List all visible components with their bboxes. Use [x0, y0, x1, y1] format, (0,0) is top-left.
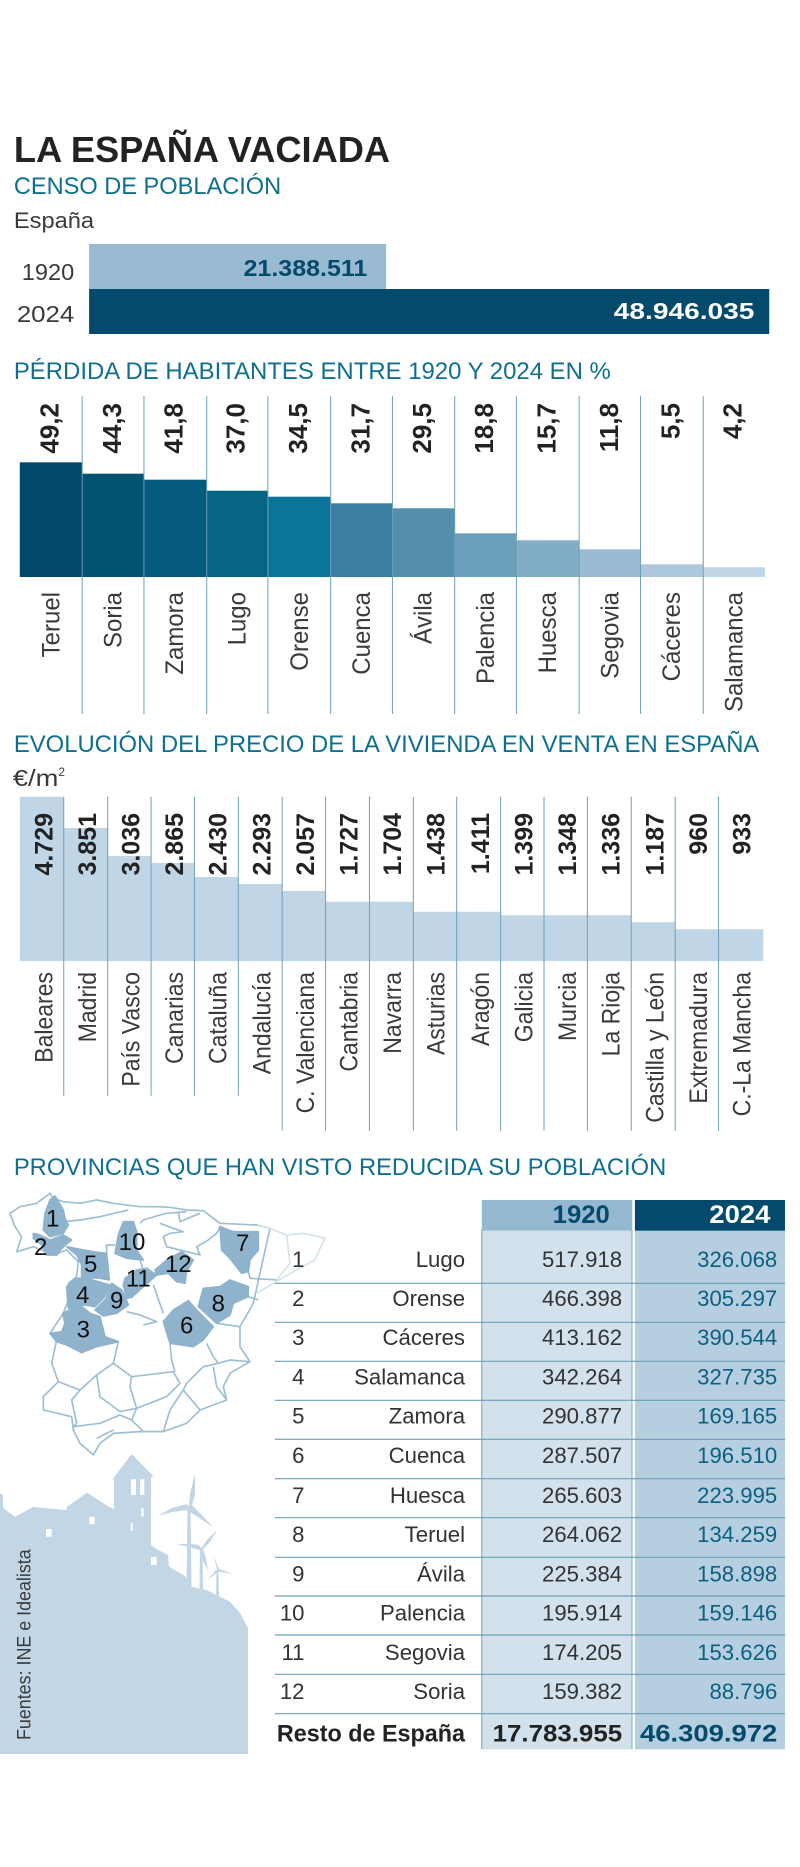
row: Orense: 305.297: [697, 1286, 777, 1311]
row: Cuenca: Cuenca: [389, 1443, 466, 1468]
map numbers: 11: [126, 1266, 151, 1293]
chart: population loss by province: Ávila: [410, 592, 438, 644]
row: Cuenca: 196.510: [697, 1443, 777, 1468]
chart: housing price by region: Murcia: [554, 971, 582, 1041]
unit label: €/m: [13, 765, 58, 791]
chart: housing price by region: 933: [729, 813, 756, 855]
chart: population loss by province: Zamora: [162, 592, 189, 675]
row: Cuenca: 287.507: [542, 1443, 622, 1468]
row: Huesca: Huesca: [390, 1483, 466, 1508]
chart: housing price by region: Cantabria: [336, 971, 364, 1072]
map numbers: 6: [180, 1312, 193, 1339]
chart: census bars: [17, 244, 769, 334]
chart: population loss by province: 44,3: [99, 403, 127, 454]
chart: housing price by region: 2.865: [161, 813, 189, 876]
row: Lugo: 517.918: [542, 1247, 622, 1272]
subheading: España: España: [14, 208, 95, 233]
row: Segovia: [281, 1640, 777, 1665]
table header: [553, 1202, 771, 1229]
chart: population loss by province: Soria: [100, 592, 127, 648]
chart: population loss by province: 15,7: [534, 403, 561, 454]
row: Lugo: [292, 1247, 777, 1272]
chart: housing price by region: 2.293: [248, 813, 276, 876]
row: Palencia: 159.146: [697, 1600, 777, 1626]
row: Resto de España: 46.309.972: [640, 1721, 777, 1748]
row: Salamanca: 342.264: [542, 1364, 622, 1390]
row: Cáceres: 390.544: [697, 1325, 777, 1350]
chart: housing price by region: 1.411: [467, 813, 495, 874]
chart: population loss by province: Teruel: [38, 592, 66, 657]
chart: population loss by province: Segovia: [597, 592, 624, 679]
row: Ávila: Ávila: [417, 1561, 466, 1587]
heading: censo de población: CENSO DE POBLACIÓN: [14, 173, 281, 200]
map numbers: 8: [212, 1291, 225, 1318]
chart: population loss by province: 49,2: [37, 403, 64, 454]
table column backgrounds: [482, 1200, 785, 1749]
chart: population loss by province: 11,8: [596, 403, 624, 452]
heading: provincias: PROVINCIAS QUE HAN VISTO REDUCIDA SU POBLACIÓN: [14, 1154, 666, 1181]
row: Huesca: 265.603: [542, 1483, 622, 1508]
illustration: village and wind turbines: [0, 1454, 248, 1754]
heading: pérdida de habitantes: PÉRDIDA DE HABITANTES ENTRE 1920 Y 2024 EN %: [14, 358, 611, 385]
pale outline: Catalonia: [257, 1225, 325, 1293]
chart: housing price by region: La Rioja: [598, 971, 626, 1056]
row: Cuenca: [292, 1443, 777, 1468]
chart: census bars: 2024: [17, 301, 75, 327]
chart: housing price by region: Castilla y León: [641, 972, 670, 1123]
row: Cáceres: [292, 1325, 777, 1350]
chart: population loss by province: Cuenca: [348, 592, 376, 675]
row: Zamora: 5: [292, 1403, 304, 1429]
map numbers: 4: [76, 1282, 89, 1309]
row: Palencia: Palencia: [380, 1600, 466, 1626]
chart: population loss by province: 37,0: [223, 403, 250, 454]
chart: housing price by region: 1.348: [554, 813, 582, 876]
row: Huesca: 7: [292, 1483, 304, 1508]
chart: housing price by region: C. Valenciana: [292, 971, 320, 1113]
row: Ávila: 158.898: [697, 1561, 777, 1587]
map numbers: 10: [119, 1229, 145, 1256]
chart: population loss by province: Orense: [286, 592, 314, 671]
row: Zamora: Zamora: [389, 1403, 466, 1429]
chart: housing price by region: C.-La Mancha: [729, 971, 757, 1116]
chart: population loss by province: 31,7: [347, 403, 375, 454]
row: Lugo: 326.068: [697, 1247, 777, 1272]
row: Zamora: 290.877: [542, 1403, 622, 1429]
heading: evolución del precio: EVOLUCIÓN DEL PRECIO DE LA VIVIENDA EN VENTA EN ESPAÑA: [14, 731, 759, 758]
row: Zamora: [292, 1403, 777, 1429]
chart: population loss by province: 5,5: [658, 403, 686, 439]
row: Palencia: 195.914: [542, 1600, 622, 1626]
row: Soria: 159.382: [542, 1679, 622, 1704]
map numbers: 3: [77, 1316, 90, 1343]
row: Palencia: [280, 1600, 777, 1626]
row: Resto de España: Resto de España: [277, 1721, 466, 1748]
row: Teruel: 264.062: [542, 1522, 622, 1547]
chart: housing price by region: Aragón: [467, 972, 495, 1046]
map numbers: 12: [165, 1251, 192, 1278]
chart: housing price by region: País Vasco: [118, 972, 146, 1087]
row: Soria: 88.796: [709, 1679, 777, 1704]
row: Resto de España: 17.783.955: [493, 1721, 622, 1748]
row: Ávila: 9: [292, 1561, 304, 1587]
chart: housing price by region: 3.036: [118, 813, 146, 876]
row: Teruel: Teruel: [405, 1522, 465, 1547]
row: Zamora: 169.165: [697, 1403, 777, 1429]
table header: 2024: [709, 1202, 771, 1229]
chart: housing price by region: 3.851: [74, 813, 102, 876]
row: Huesca: [292, 1483, 777, 1508]
chart: population loss by province: 34,5: [285, 403, 313, 454]
row: Orense: Orense: [392, 1286, 465, 1311]
chart: housing price by region: Galicia: [511, 971, 539, 1042]
row: Salamanca: 327.735: [697, 1364, 777, 1390]
row: Teruel: 8: [292, 1522, 304, 1547]
row: Palencia: 10: [280, 1600, 304, 1626]
chart: population loss by province: Lugo: [224, 592, 252, 645]
map numbers: 9: [110, 1287, 123, 1314]
row: Soria: 12: [280, 1679, 304, 1704]
row: Segovia: 153.626: [697, 1640, 777, 1665]
row: Segovia: 11: [281, 1640, 304, 1665]
title: LA ESPAÑA VACIADA: [14, 130, 390, 170]
row: Cuenca: 6: [292, 1443, 304, 1468]
chart: housing price by region: Madrid: [74, 972, 102, 1042]
row: Salamanca: 4: [292, 1364, 304, 1390]
chart: housing price by region: Andalucía: [248, 971, 277, 1074]
map of Spain: [10, 1193, 325, 1455]
chart: housing price by region: [20, 797, 763, 1131]
chart: population loss by province: 4,2: [720, 403, 747, 439]
highlighted provinces: [33, 1196, 258, 1353]
row: Salamanca: Salamanca: [354, 1364, 466, 1390]
row: Resto de España: [277, 1721, 777, 1748]
row: Soria: Soria: [413, 1679, 466, 1704]
row: Lugo: Lugo: [416, 1247, 465, 1272]
row: Cáceres: 3: [292, 1325, 304, 1350]
chart: population loss by province: [20, 396, 765, 714]
map numbers: 2: [34, 1234, 47, 1261]
chart: housing price by region: 1.187: [641, 813, 669, 876]
row: Teruel: 134.259: [697, 1522, 777, 1547]
chart: housing price by region: 1.336: [598, 813, 626, 876]
row: Huesca: 223.995: [697, 1483, 777, 1508]
row: Ávila: [292, 1561, 777, 1587]
chart: housing price by region: 4.729: [31, 813, 58, 876]
unit label: 2: [58, 765, 65, 779]
row: Ávila: 225.384: [542, 1561, 622, 1587]
row: Orense: [292, 1286, 777, 1311]
chart: population loss by province: Huesca: [534, 592, 562, 673]
row: Segovia: Segovia: [385, 1640, 466, 1665]
map numbers: [34, 1206, 249, 1343]
chart: population loss by province: 18,8: [471, 403, 499, 454]
row: Orense: 466.398: [542, 1286, 622, 1311]
chart: housing price by region: Extremadura: [685, 971, 713, 1104]
row: Orense: 2: [292, 1286, 304, 1311]
chart: housing price by region: 1.438: [423, 813, 450, 876]
row: Cáceres: 413.162: [542, 1325, 622, 1350]
table: population by province: [275, 1200, 785, 1749]
chart: population loss by province: Cáceres: [659, 592, 686, 681]
chart: population loss by province: Salamanca: [721, 592, 749, 712]
chart: housing price by region: 1.704: [379, 813, 407, 876]
chart: housing price by region: Asturias: [423, 972, 451, 1055]
row: Teruel: [292, 1522, 777, 1547]
chart: housing price by region: 1.727: [336, 813, 363, 876]
row: Soria: [280, 1679, 777, 1704]
chart: housing price by region: 960: [685, 813, 713, 855]
chart: housing price by region: Navarra: [379, 971, 407, 1054]
chart: housing price by region: Canarias: [161, 972, 189, 1064]
chart: population loss by province: 29,5: [409, 403, 437, 454]
map numbers: 7: [236, 1230, 249, 1257]
chart: housing price by region: 1.399: [511, 813, 539, 876]
row: Cáceres: Cáceres: [383, 1325, 465, 1350]
chart: population loss by province: 41,8: [161, 403, 189, 454]
row: Lugo: 1: [292, 1247, 304, 1272]
chart: housing price by region: 2.057: [292, 813, 320, 876]
chart: census bars: 1920: [22, 259, 74, 285]
chart: housing price by region: Baleares: [31, 972, 59, 1063]
chart: housing price by region: Cataluña: [205, 971, 233, 1064]
chart: population loss by province: Palencia: [472, 592, 500, 684]
chart: census bars: 48.946.035: [614, 298, 755, 324]
source note: Fuentes: INE e Idealista: [15, 1549, 36, 1740]
map numbers: 1: [46, 1206, 59, 1233]
row: Segovia: 174.205: [542, 1640, 622, 1665]
table header: 1920: [553, 1202, 610, 1229]
map numbers: 5: [84, 1251, 97, 1278]
row: Salamanca: [292, 1364, 777, 1390]
chart: census bars: 21.388.511: [244, 255, 368, 281]
chart: housing price by region: 2.430: [205, 813, 233, 876]
